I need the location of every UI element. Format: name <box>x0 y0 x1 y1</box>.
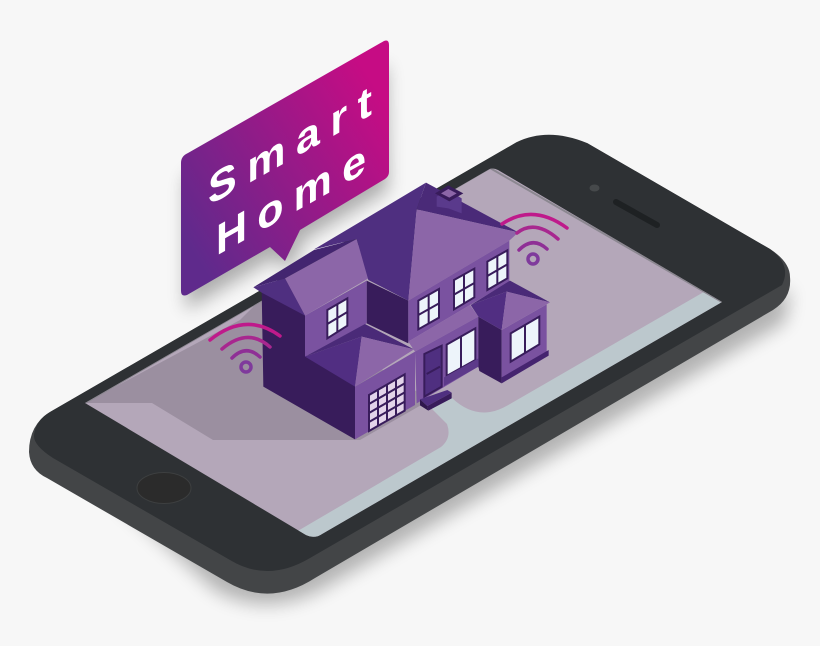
screen edge shade <box>85 168 722 403</box>
upper window 2 <box>454 269 474 309</box>
main upper wall <box>408 241 509 342</box>
home button <box>137 472 191 504</box>
garage roof back <box>305 324 414 357</box>
phone <box>29 135 790 594</box>
wifi signal left <box>210 324 280 372</box>
chimney stack <box>437 190 462 213</box>
bubble text: Home: Home <box>216 133 366 265</box>
wifi signal right <box>502 214 567 264</box>
left wing eave <box>253 239 357 287</box>
road <box>296 289 730 545</box>
speaker <box>616 202 657 225</box>
left wing wall <box>305 281 367 357</box>
upper window 3 <box>487 250 507 290</box>
base left <box>478 366 502 383</box>
garage wall <box>355 352 415 439</box>
bay roof front <box>502 292 550 330</box>
chimney top <box>435 185 463 201</box>
porch roof <box>408 305 478 352</box>
steps <box>420 390 452 411</box>
house shadow on ground <box>85 295 430 440</box>
garage roof front <box>355 337 414 387</box>
step top <box>420 390 452 406</box>
left wing window <box>327 298 347 338</box>
step front <box>427 393 452 411</box>
upper window 1 <box>418 289 439 329</box>
speech bubble shadow <box>186 64 388 310</box>
base front <box>502 350 549 383</box>
left wing roof side <box>253 278 305 316</box>
chimney <box>435 185 463 213</box>
garage door <box>369 374 405 431</box>
bay base <box>478 350 549 383</box>
bay window <box>511 317 539 362</box>
phone body side <box>29 142 790 594</box>
bay roof left <box>471 292 507 330</box>
camera <box>590 184 600 192</box>
step side <box>420 399 428 411</box>
screen <box>80 160 730 545</box>
door panel <box>424 346 442 397</box>
speech bubble <box>181 40 389 296</box>
screen lawn <box>80 160 730 545</box>
window sill <box>444 358 478 386</box>
bubble text: Smart: Smart <box>208 75 372 215</box>
garage roof left <box>305 337 362 387</box>
bubble shape <box>181 40 389 296</box>
phone shadow <box>50 290 790 604</box>
left wing roof front <box>285 239 368 316</box>
door <box>424 346 442 397</box>
bay roof back <box>471 281 550 305</box>
house <box>253 183 550 439</box>
main roof front <box>408 209 518 301</box>
bay front wall <box>502 304 547 378</box>
main roof back sliver <box>417 183 518 232</box>
main roof left face <box>314 183 426 301</box>
left wall <box>262 278 355 439</box>
upper windows <box>327 250 539 376</box>
front lower wall <box>415 317 478 403</box>
bay left wall <box>478 317 502 382</box>
notch wall <box>367 281 408 343</box>
front big window <box>447 328 475 376</box>
chimney opening <box>441 189 457 198</box>
phone top face <box>34 135 785 571</box>
